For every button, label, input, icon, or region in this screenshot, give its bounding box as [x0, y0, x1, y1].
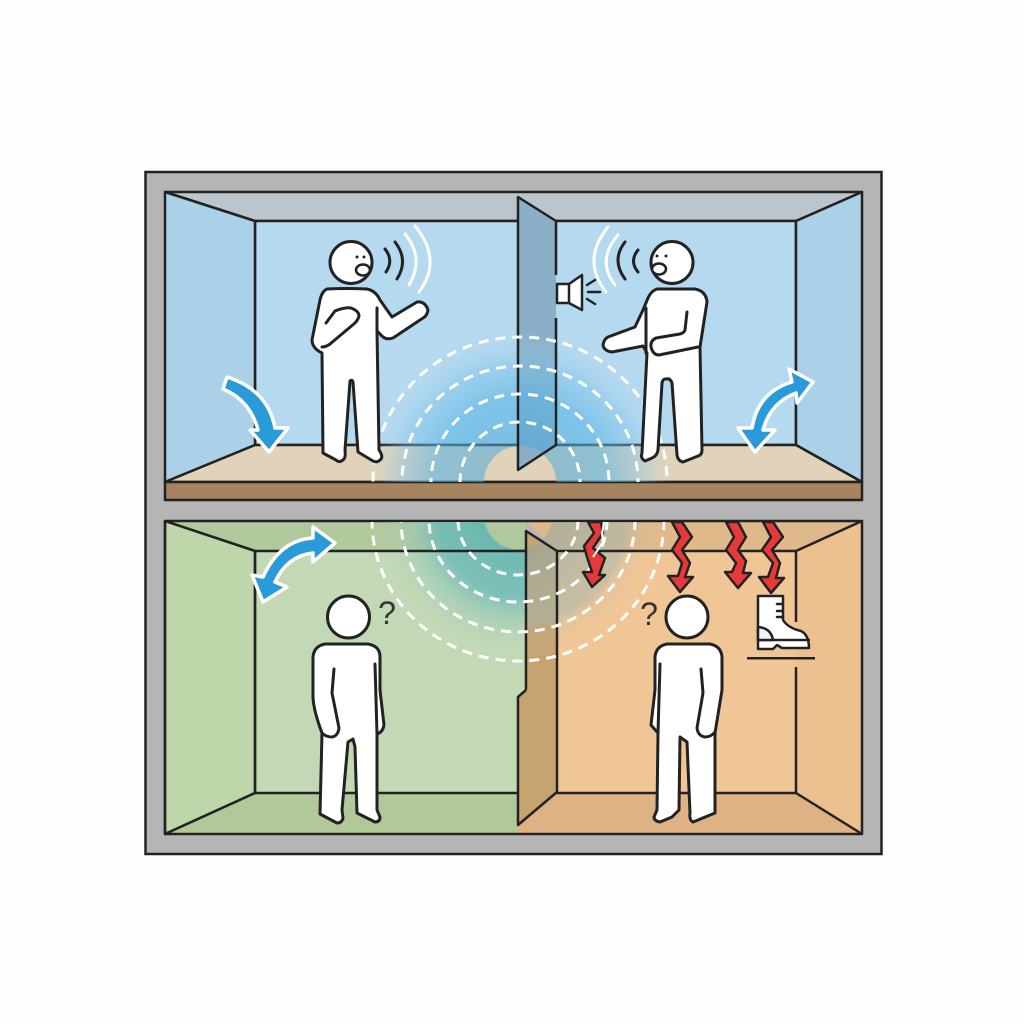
icon: speech waves left: [385, 226, 430, 292]
panel: upper room: [165, 192, 862, 500]
upper room floor: [165, 445, 862, 482]
icon: boot: [758, 596, 809, 649]
arrow: lower left air flow: [252, 527, 335, 602]
arrow: upper right air flow: [738, 369, 813, 452]
bolt three: [725, 522, 751, 588]
upper partition: [518, 197, 556, 470]
upper room floor slab: [165, 482, 862, 500]
sound glow upper: [373, 347, 667, 482]
crack in bolt one: [593, 522, 604, 557]
person: upper left speaking: [312, 242, 428, 462]
lower right back wall: [557, 551, 796, 793]
icon: question mark left: ?: [378, 595, 396, 631]
partition outlines: [255, 197, 796, 825]
building frame: [146, 172, 882, 854]
lower left floor: [165, 793, 518, 834]
upper room right wall: [796, 192, 862, 482]
upper room ceiling: [165, 192, 862, 221]
icon: impact bolts: [583, 522, 784, 593]
person: lower left confused: [313, 596, 384, 823]
lower partition: [518, 531, 557, 825]
arrow: upper left air flow: [223, 377, 288, 452]
lower room outline: [165, 521, 862, 834]
lower right side wall: [796, 521, 862, 834]
lower right ceiling: [526, 521, 862, 551]
lower left ceiling: [165, 521, 526, 551]
bolt one: [583, 522, 605, 587]
shelf line: [747, 657, 815, 660]
icon: speaker on partition: [557, 275, 600, 310]
icon: speech waves right: [594, 227, 638, 292]
sound glow lower left: [378, 522, 525, 638]
upper room left wall: [165, 192, 255, 482]
panel: lower room: [165, 521, 862, 834]
bolt two: [668, 522, 693, 592]
sound waves upper room: [372, 336, 668, 482]
sound waves lower room: [370, 522, 666, 662]
person: upper right speaking: [603, 242, 707, 462]
icon: question mark right: ?: [640, 596, 658, 632]
bolt four: [759, 522, 784, 593]
lower left back wall: [255, 551, 526, 793]
upper room back wall: [255, 221, 796, 445]
lower left side wall: [165, 521, 255, 834]
lower right floor: [518, 793, 862, 834]
person: lower right confused: [651, 596, 722, 822]
sound glow lower right: [527, 522, 644, 634]
